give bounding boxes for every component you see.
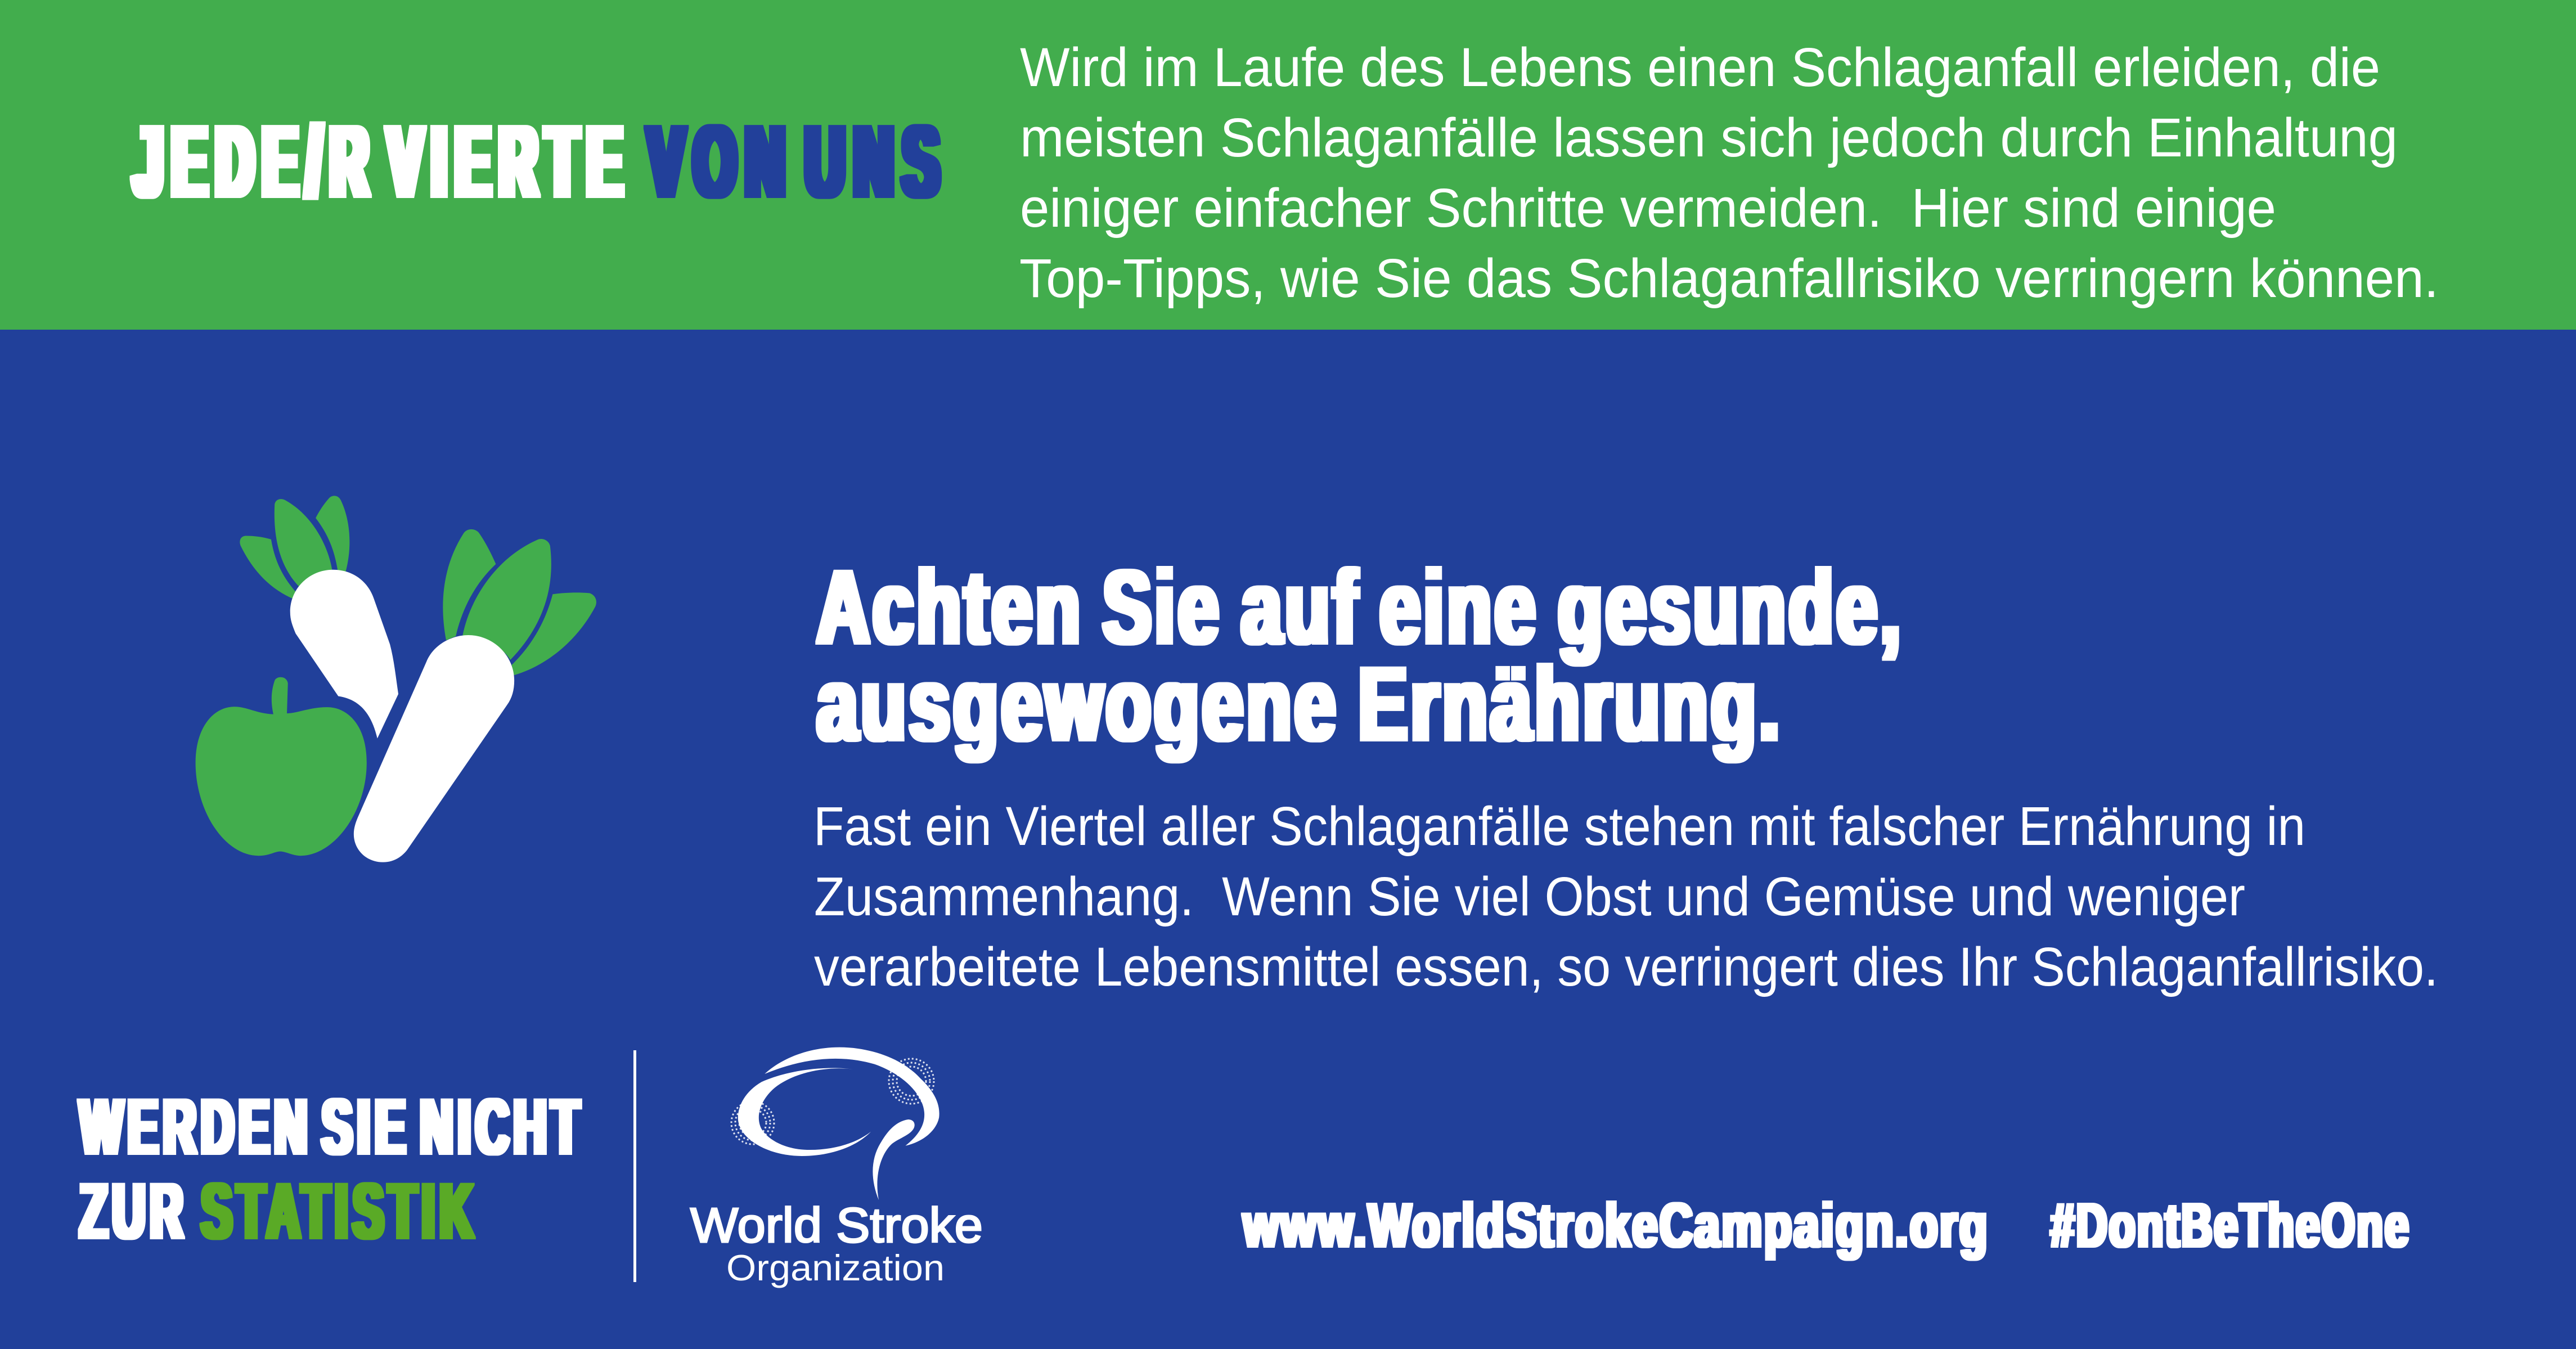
logo: brain mark xyxy=(738,1047,939,1200)
heading: healthy diet: Achten Sie auf eine gesunde, xyxy=(817,550,1904,665)
slogan: Werden Sie nicht zur Statistik: WERDEN SIE NICHT xyxy=(80,1082,585,1171)
text block: diet explanation: Zusammenhang. Wenn Sie viel Obst und Gemüse und weniger xyxy=(814,866,2245,927)
hashtag: DontBeTheOne: #DontBeTheOne xyxy=(2051,1191,2411,1260)
logo: wordmark: Organization xyxy=(726,1247,945,1288)
logo: wordmark: World Stroke xyxy=(690,1198,983,1253)
link: campaign website: www.WorldStrokeCampaign.org xyxy=(1243,1191,1989,1260)
logo: World Stroke Organization xyxy=(690,1047,983,1288)
icon: apple xyxy=(196,677,367,856)
slogan: Werden Sie nicht zur Statistik: ZUR xyxy=(80,1167,188,1255)
heading: Jede/r Vierte von uns: VON UNS xyxy=(648,105,948,218)
icon: apple and vegetables xyxy=(196,496,596,862)
heading: healthy diet xyxy=(817,550,1904,762)
text block: banner intro xyxy=(1019,37,2439,309)
heading: Jede/r Vierte von uns: JEDE/R VIERTE xyxy=(134,105,631,218)
text block: banner intro: Wird im Laufe des Lebens einen Schlaganfall erleiden, die xyxy=(1020,37,2380,98)
text block: diet explanation: verarbeitete Lebensmittel essen, so verringert dies Ihr Schlaganfallrisiko. xyxy=(814,936,2438,997)
text block: banner intro: Top-Tipps, wie Sie das Schlaganfallrisiko verringern können. xyxy=(1019,248,2439,309)
panel: green top banner xyxy=(0,0,2576,330)
logo: wordmark xyxy=(690,1198,983,1288)
text block: diet explanation xyxy=(813,795,2438,997)
icon: large white vegetable xyxy=(354,635,514,862)
text block: banner intro: meisten Schlaganfälle lassen sich jedoch durch Einhaltung xyxy=(1020,107,2398,168)
logo: dotted halos xyxy=(731,1059,934,1144)
icon: large vegetable leaves xyxy=(443,529,596,675)
text block: diet explanation: Fast ein Viertel aller Schlaganfälle stehen mit falscher Ernährung in xyxy=(813,795,2305,857)
icon: small vegetable leaves xyxy=(240,496,349,599)
icon: small white vegetable xyxy=(290,570,398,739)
text block: banner intro: einiger einfacher Schritte vermeiden. Hier sind einige xyxy=(1020,177,2276,239)
heading: healthy diet: ausgewogene Ernährung. xyxy=(817,646,1783,762)
slogan: Werden Sie nicht zur Statistik: STATISTIK xyxy=(201,1167,478,1255)
slogan: Werden Sie nicht zur Statistik xyxy=(80,1082,585,1255)
